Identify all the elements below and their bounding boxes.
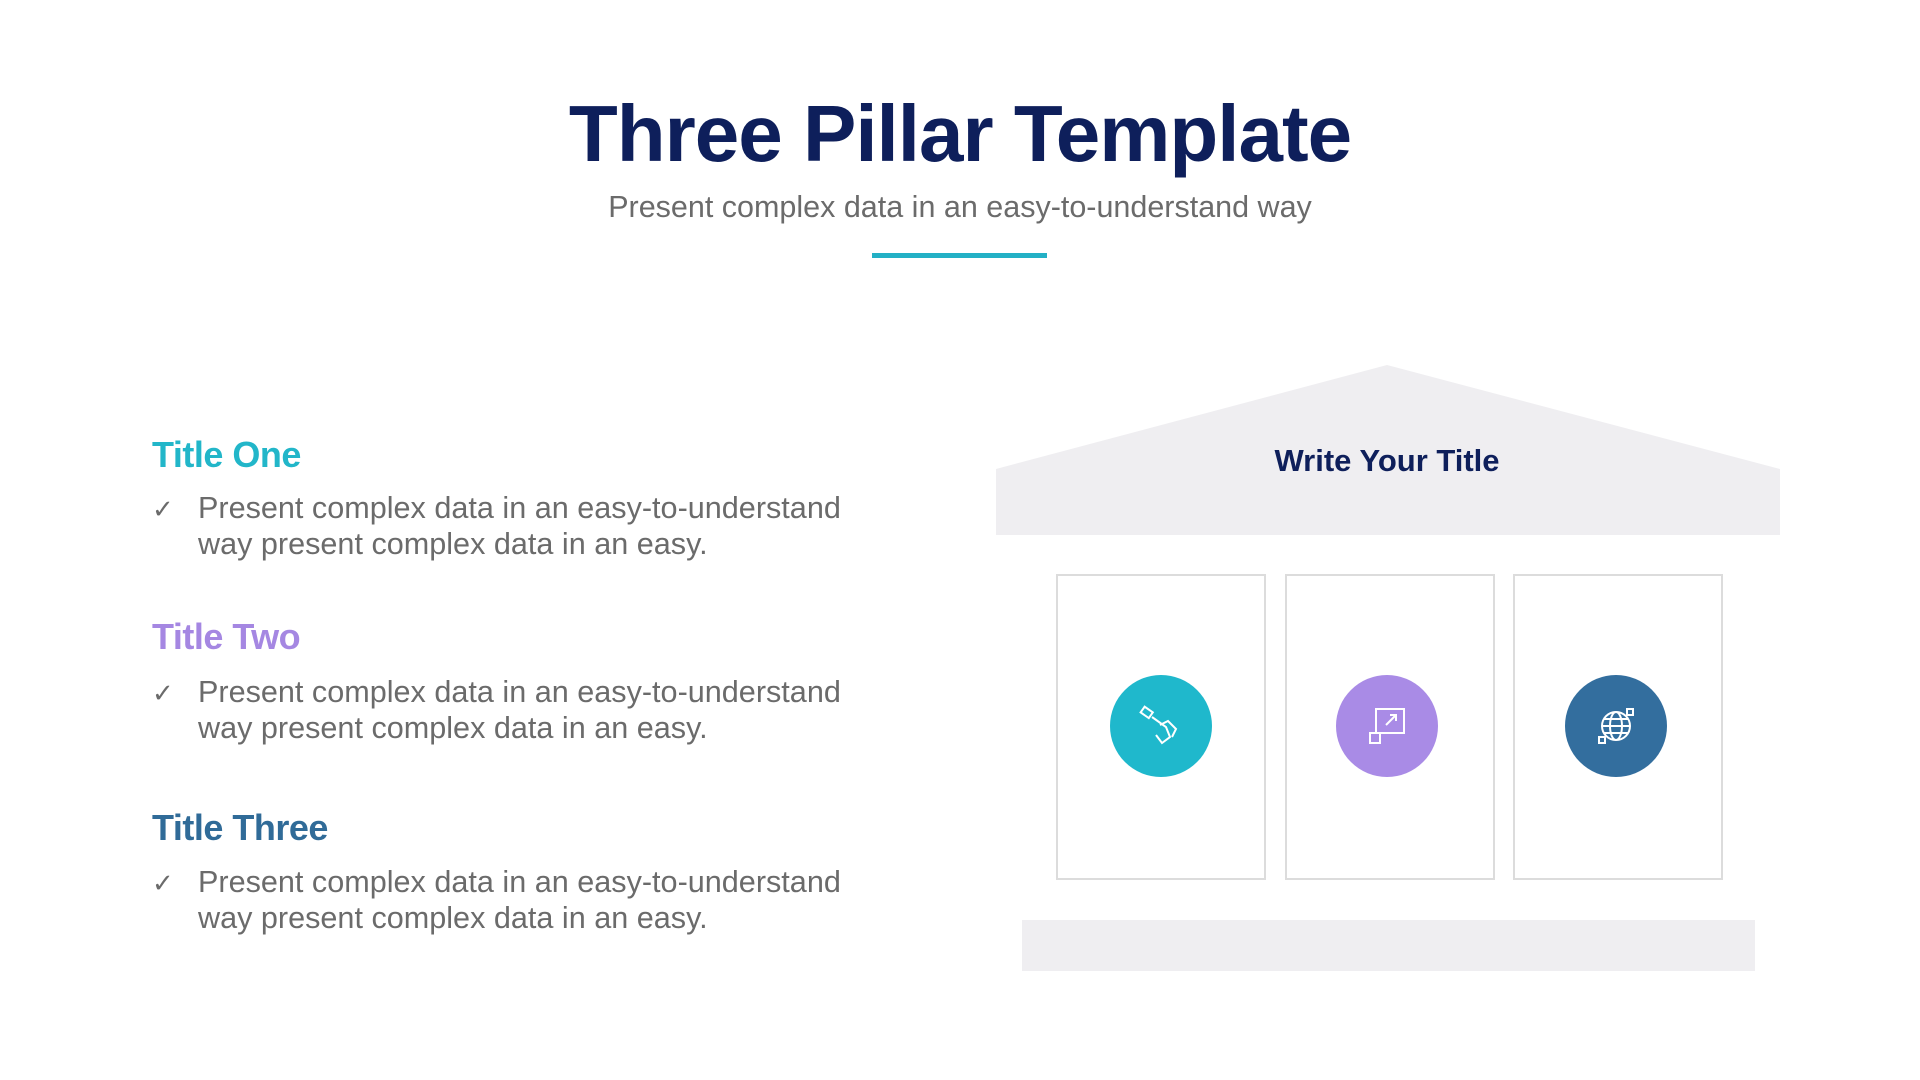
item two text: Present complex data in an easy-to-understand — [198, 675, 841, 709]
underline accent — [872, 253, 1047, 258]
roof — [996, 365, 1780, 535]
item three text: way present complex data in an easy. — [198, 900, 708, 934]
item two text: ✓ — [152, 678, 174, 708]
item one text: ✓ — [152, 494, 174, 524]
pillar 3 — [1513, 574, 1723, 880]
item one heading: Title One — [152, 434, 301, 475]
item three text: ✓ — [152, 868, 174, 898]
pillar 2 — [1285, 574, 1495, 880]
subtitle: Present complex data in an easy-to-understand way — [608, 190, 1312, 224]
pillar 1 — [1056, 574, 1266, 880]
item three text — [152, 865, 841, 934]
icon: globe — [1565, 675, 1667, 777]
item two heading: Title Two — [152, 616, 300, 657]
item two text — [152, 675, 841, 744]
item one text — [152, 491, 841, 560]
icon: handshake — [1110, 675, 1212, 777]
icon: expand — [1336, 675, 1438, 777]
item three text: Present complex data in an easy-to-understand — [198, 865, 841, 899]
roof title: Write Your Title — [1274, 443, 1500, 478]
item three heading: Title Three — [152, 807, 328, 848]
title: Three Pillar Template — [569, 89, 1351, 178]
item two text: way present complex data in an easy. — [198, 710, 708, 744]
base — [1022, 920, 1755, 971]
item one text: way present complex data in an easy. — [198, 526, 708, 560]
item one text: Present complex data in an easy-to-understand — [198, 491, 841, 525]
